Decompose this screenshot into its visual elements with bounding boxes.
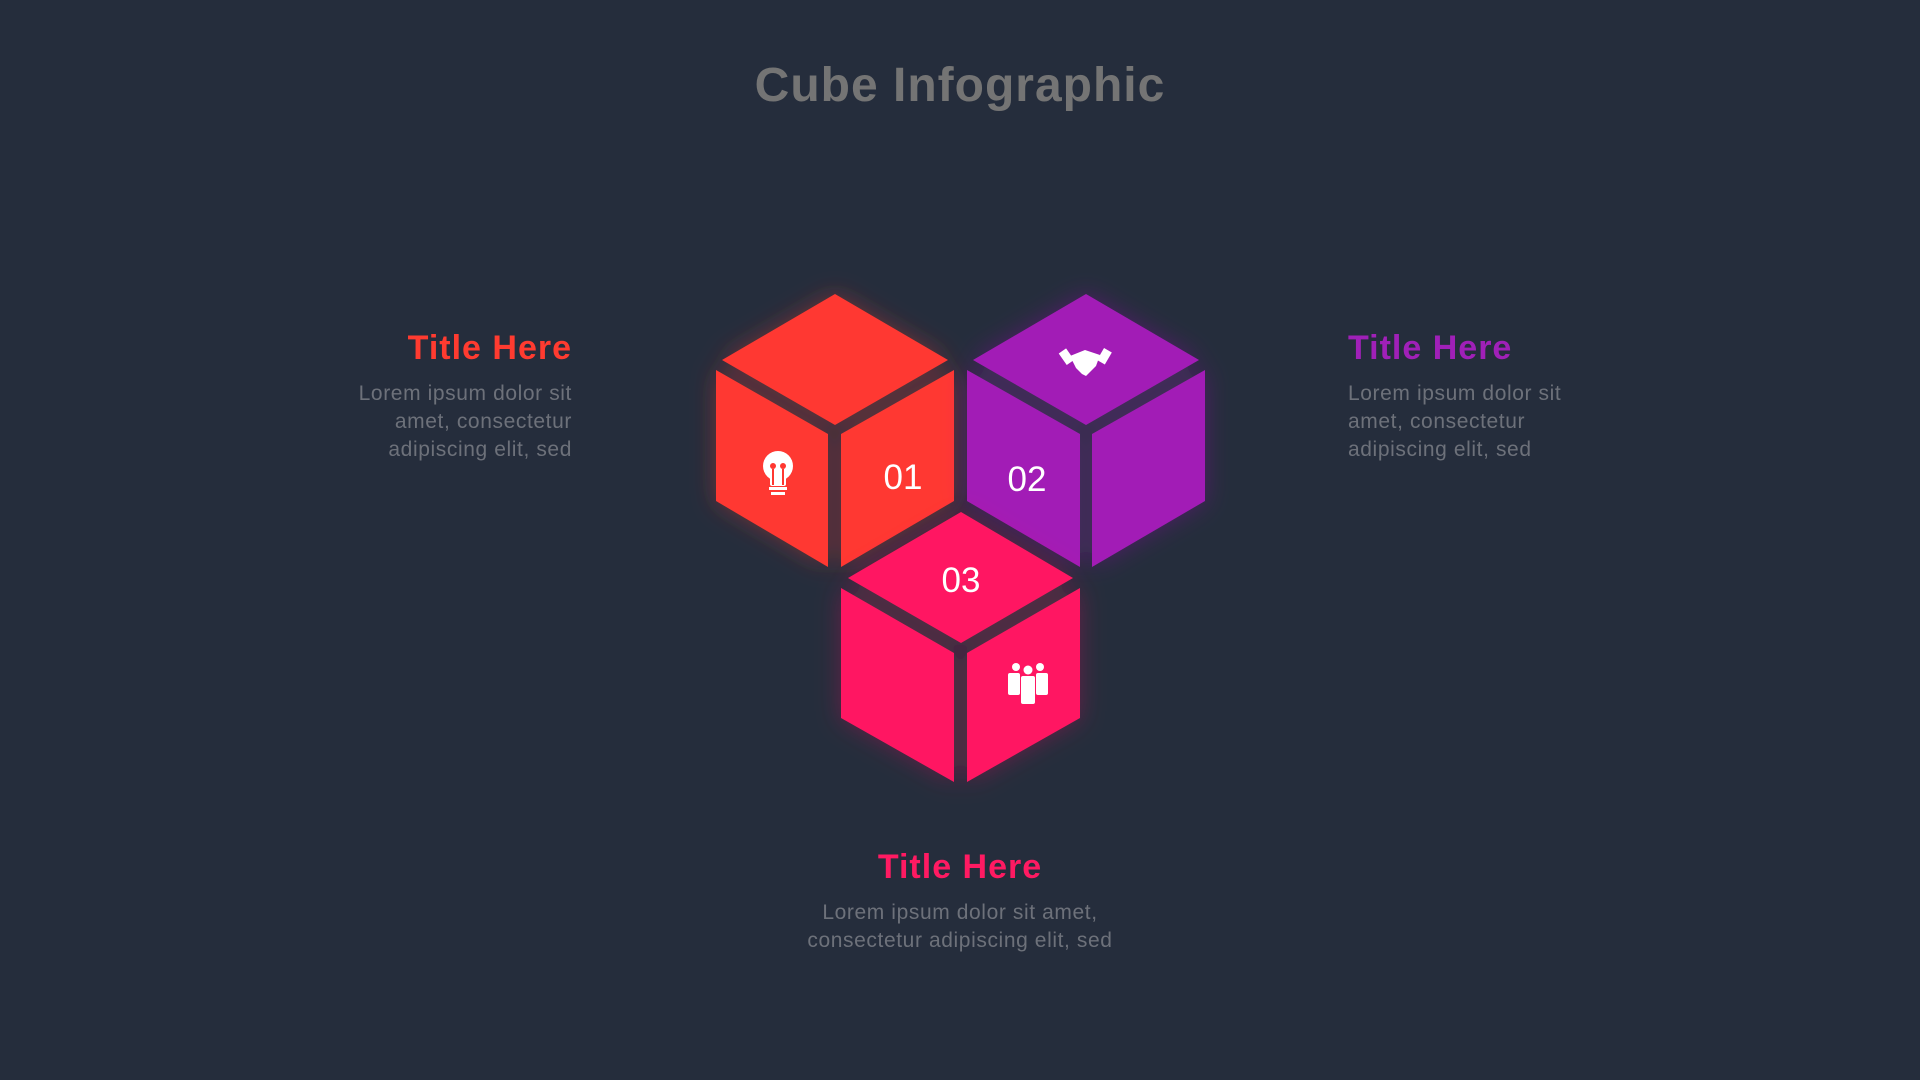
body: bottom xyxy=(807,901,1113,952)
body: left xyxy=(359,382,572,461)
icon: team xyxy=(1008,663,1048,704)
body: left: Lorem ipsum dolor sit xyxy=(359,382,572,405)
body: right: adipiscing elit, sed xyxy=(1348,438,1532,461)
title: Cube Infographic xyxy=(755,59,1165,112)
body: left: adipiscing elit, sed xyxy=(388,438,572,461)
heading: bottom: Title Here xyxy=(878,848,1042,886)
body: bottom: consectetur adipiscing elit, sed xyxy=(807,929,1113,952)
left text block xyxy=(359,329,572,461)
body: right xyxy=(1348,382,1561,461)
body: right: amet, consectetur xyxy=(1348,410,1525,433)
cube 03 xyxy=(841,512,1080,782)
bottom text block xyxy=(807,848,1113,952)
number 02: 02 xyxy=(1008,460,1046,499)
cube 02 xyxy=(967,294,1205,567)
right text block xyxy=(1348,329,1561,461)
number 03: 03 xyxy=(942,561,980,600)
number 01: 01 xyxy=(884,458,922,497)
icon: lightbulb xyxy=(763,451,793,495)
body: right: Lorem ipsum dolor sit xyxy=(1348,382,1561,405)
body: bottom: Lorem ipsum dolor sit amet, xyxy=(822,901,1098,924)
heading: left: Title Here xyxy=(408,329,572,367)
heading: right: Title Here xyxy=(1348,329,1512,367)
cube 01 xyxy=(716,294,954,567)
icon: handshake xyxy=(1059,348,1112,376)
body: left: amet, consectetur xyxy=(395,410,572,433)
